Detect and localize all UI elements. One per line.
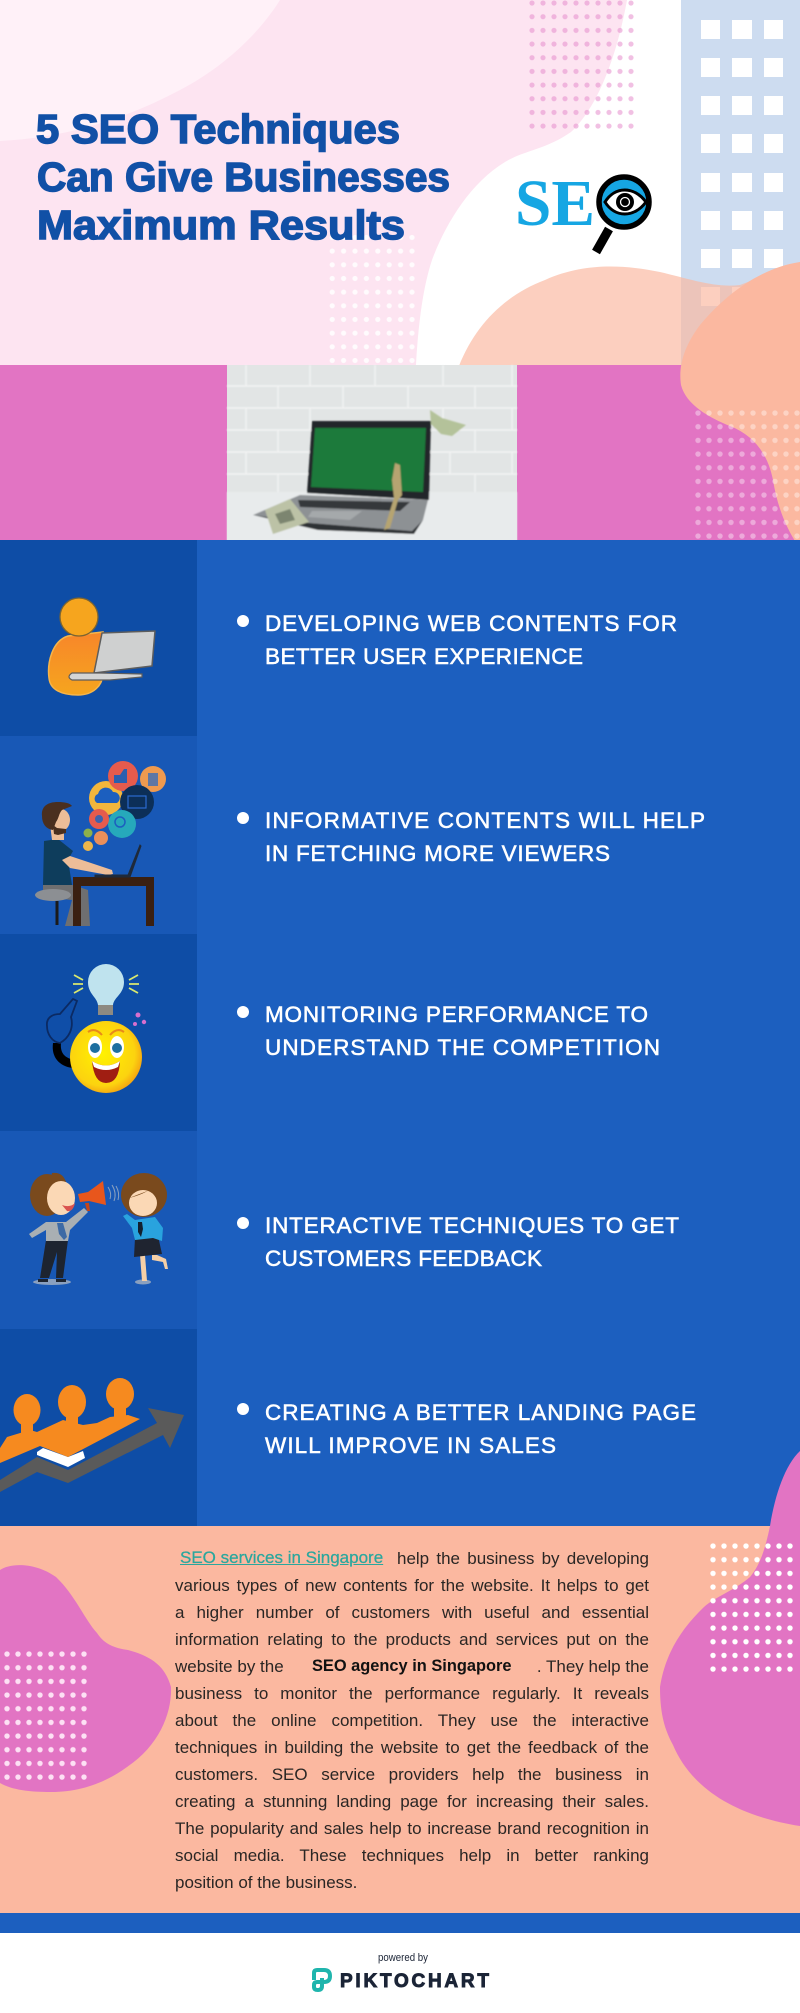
bullet point 3: UNDERSTAND THE COMPETITION: [265, 1035, 660, 1060]
bullet point 4: INTERACTIVE TECHNIQUES TO GET: [265, 1213, 679, 1238]
body paragraph: SEO services in Singapore: [180, 1548, 383, 1567]
icon: SEO logo with magnifier: SE: [515, 167, 595, 240]
photo: laptop with dollar bills: [227, 365, 517, 541]
body paragraph: creating a stunning landing page for increasing their sales.: [175, 1792, 649, 1811]
title: Maximum Results: [37, 202, 405, 248]
footer: powered by Piktochart: [0, 1933, 800, 2013]
bullet point 3: MONITORING PERFORMANCE TO: [265, 1002, 648, 1027]
body paragraph: techniques in building the website to get the feedback of the: [175, 1738, 649, 1757]
body paragraph: social media. These techniques help in better ranking: [175, 1846, 649, 1865]
bullet point 1: [237, 611, 677, 669]
bullet point 3: [237, 1002, 660, 1060]
body paragraph: various types of new contents for the website. It helps to get: [175, 1576, 649, 1595]
bullet point 4: [237, 1213, 679, 1271]
body paragraph: website by the: [175, 1657, 284, 1676]
body paragraph: customers. SEO service providers help the business in: [175, 1765, 649, 1784]
panel: header background: [0, 0, 800, 367]
body paragraph: help the business by developing: [397, 1549, 649, 1568]
icon: person with laptop: [49, 598, 155, 695]
panel: pink band: [0, 262, 800, 543]
body paragraph: [175, 1548, 649, 1892]
body paragraph: a higher number of customers with useful and essential: [175, 1603, 649, 1622]
icon: man at desk with app bubbles: [35, 761, 166, 926]
body paragraph: position of the business.: [175, 1873, 357, 1892]
bullet point 5: [237, 1400, 696, 1458]
bullet point 1: BETTER USER EXPERIENCE: [265, 644, 583, 669]
bullet point 2: [237, 808, 705, 866]
bullet point 2: IN FETCHING MORE VIEWERS: [265, 841, 610, 866]
icon: man with megaphone and woman: [29, 1173, 168, 1285]
footer: powered by Piktochart: PIKTOCHART: [340, 1971, 489, 1992]
body paragraph: The popularity and sales help to increase brand recognition in: [175, 1819, 649, 1838]
bullet point 4: CUSTOMERS FEEDBACK: [265, 1246, 542, 1271]
bullet point 2: INFORMATIVE CONTENTS WILL HELP: [265, 808, 705, 833]
bullet point 1: DEVELOPING WEB CONTENTS FOR: [265, 611, 677, 636]
title: 5 SEO Techniques: [36, 106, 400, 152]
panel: peach text section: [0, 1451, 800, 1913]
bullet point 5: CREATING A BETTER LANDING PAGE: [265, 1400, 696, 1425]
icon: team with rising arrow: [0, 1378, 184, 1492]
body paragraph: . They help the: [537, 1657, 649, 1676]
panel: blue list background: [0, 540, 800, 1527]
footer: powered by Piktochart: powered by: [378, 1952, 428, 1964]
icon: smiley with light bulb: [47, 964, 146, 1093]
bullet point 5: WILL IMPROVE IN SALES: [265, 1433, 556, 1458]
icon: SEO logo with magnifier: [515, 167, 649, 252]
body paragraph: SEO agency in Singapore: [312, 1657, 511, 1675]
title: Can Give Businesses: [37, 154, 450, 200]
body paragraph: information relating to the products and services put on the: [175, 1630, 649, 1649]
body paragraph: business to monitor the performance regularly. It reveals: [175, 1684, 649, 1703]
bottom blue bar: [0, 1913, 800, 1933]
title: [36, 106, 450, 248]
body paragraph: about the online competition. They use the interactive: [175, 1711, 649, 1730]
